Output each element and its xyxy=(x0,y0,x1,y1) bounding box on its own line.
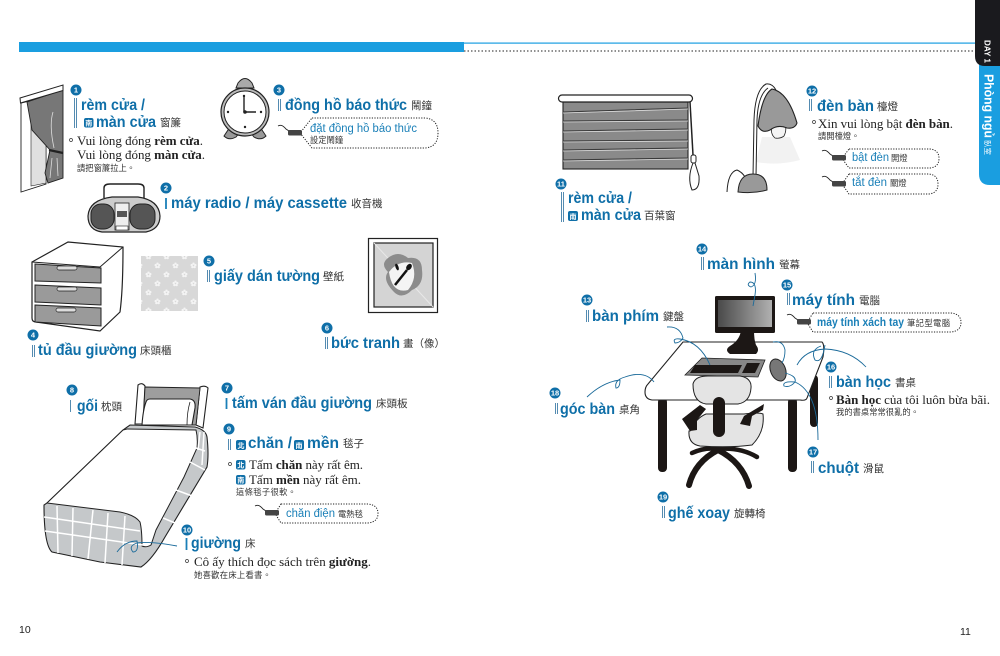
tag: chăn điện: 電熱毯 xyxy=(338,508,363,520)
tag: bật đèn: 開燈 xyxy=(891,152,908,164)
item 7: tấm ván đầu giường: 7 xyxy=(225,384,229,393)
icon: roller blind xyxy=(558,95,699,190)
item 9: chăn / mền: 毯子 xyxy=(343,436,364,451)
item 10: giường: 她喜歡在床上看書。 xyxy=(194,569,271,581)
item 12: đèn bàn: 檯燈 xyxy=(877,99,898,114)
item 1: rèm cửa: 請把窗簾拉上。 xyxy=(77,162,135,174)
tag: máy tính xách tay: máy tính xách tay xyxy=(817,317,905,329)
item 8: gối: gối xyxy=(77,398,98,415)
item 15: máy tính: 電腦 xyxy=(859,293,880,308)
item 5: giấy dán tường: 壁紙 xyxy=(323,269,344,284)
item 1: rèm cửa: Vui lòng đóng màn cửa. xyxy=(77,147,205,162)
item 6: bức tranh: 畫（像） xyxy=(403,336,445,351)
side tab: DAY 1 / Phòng ngủ: 臥室 xyxy=(982,140,993,155)
item 17: chuột: 滑鼠 xyxy=(863,461,884,476)
tag: đặt đồng hồ báo thức: 設定鬧鐘 xyxy=(310,134,344,146)
item 3: đồng hồ báo thức: 鬧鐘 xyxy=(411,98,432,113)
item 7: tấm ván đầu giường: tấm ván đầu giường xyxy=(232,395,372,412)
header bar xyxy=(19,42,975,52)
item 9: chăn / mền: 南 xyxy=(237,476,244,486)
item 19: ghế xoay xyxy=(658,492,766,522)
desk top xyxy=(645,342,824,400)
item 16: bàn học: Bàn học của tôi luôn bừa bãi. xyxy=(836,392,990,407)
item 1: rèm cửa: rèm cửa / xyxy=(81,97,145,114)
item 4: tủ đầu giường xyxy=(28,330,172,359)
item 8: gối: 枕頭 xyxy=(101,399,122,414)
tag: chăn điện xyxy=(255,504,378,523)
page number 11: 11 xyxy=(960,626,971,638)
item 7: tấm ván đầu giường xyxy=(222,382,408,412)
item 13: bàn phím: bàn phím xyxy=(592,308,659,325)
tag: máy tính xách tay xyxy=(787,313,961,332)
item 16: bàn học: 我的書桌常常很亂的。 xyxy=(836,406,919,418)
item 18: góc bàn: góc bàn xyxy=(560,401,615,418)
item 12: đèn bàn: 12 xyxy=(808,87,816,96)
item 12: đèn bàn xyxy=(806,86,953,194)
item 2: máy radio / máy cassette: 2 xyxy=(164,184,168,193)
item 5: giấy dán tường: 5 xyxy=(207,257,211,266)
monitor xyxy=(715,296,775,354)
item 10: giường: Cô ấy thích đọc sách trên giường. xyxy=(194,554,371,569)
keyboard xyxy=(685,358,765,377)
icon: desk lamp xyxy=(727,84,800,193)
item 11: rèm cửa / màn cửa: 百葉窗 xyxy=(644,208,676,223)
item 14: màn hình xyxy=(696,244,800,273)
item 9: chăn / mền: 北 xyxy=(237,460,244,470)
item 12: đèn bàn: đèn bàn xyxy=(817,98,874,115)
item 19: ghế xoay: ghế xoay xyxy=(668,505,730,522)
item 4: tủ đầu giường: 4 xyxy=(31,331,36,340)
item 18: góc bàn: 18 xyxy=(551,389,559,398)
leader lines xyxy=(587,273,866,440)
item 2: máy radio / máy cassette xyxy=(160,182,383,212)
item 4: tủ đầu giường: 床頭櫃 xyxy=(140,343,172,358)
item 13: bàn phím: 鍵盤 xyxy=(663,309,684,324)
side tab: DAY 1 / Phòng ngủ xyxy=(975,0,1000,185)
item 17: chuột xyxy=(808,446,884,477)
tag: đặt đồng hồ báo thức: đặt đồng hồ báo thức xyxy=(310,123,417,135)
tag: tắt đèn xyxy=(822,174,938,194)
item 11: rèm cửa / màn cửa: rèm cửa / xyxy=(568,190,632,207)
item 2: máy radio / máy cassette: máy radio / máy cassette xyxy=(171,195,347,212)
item 1: rèm cửa: 窗簾 xyxy=(160,115,181,130)
page number 10: 10 xyxy=(19,624,31,636)
item 16: bàn học xyxy=(826,362,990,418)
tag: chăn điện: chăn điện xyxy=(286,508,335,520)
item 9: chăn / mền: chăn / xyxy=(248,435,293,452)
item 16: bàn học: 書桌 xyxy=(895,375,916,390)
tag: bật đèn xyxy=(822,149,939,168)
item 17: chuột: 17 xyxy=(809,448,817,457)
item 10: giường: 床 xyxy=(245,536,256,551)
item 12: đèn bàn: 請開檯燈。 xyxy=(818,130,860,142)
icon: bed xyxy=(44,384,208,567)
item 10: giường: giường xyxy=(191,535,241,552)
item 10: giường xyxy=(182,524,371,581)
item 14: màn hình: 螢幕 xyxy=(779,257,800,272)
item 14: màn hình: 14 xyxy=(698,245,707,254)
item 15: máy tính xyxy=(782,280,961,332)
item 9: chăn / mền: 這條毯子很軟。 xyxy=(236,486,296,498)
item 9: chăn / mền xyxy=(224,424,378,523)
item 5: giấy dán tường: giấy dán tường xyxy=(214,268,320,285)
item 14: màn hình: màn hình xyxy=(707,256,775,273)
tag: máy tính xách tay: 筆記型電腦 xyxy=(907,317,950,329)
item 13: bàn phím xyxy=(582,294,684,325)
item 3: đồng hồ báo thức xyxy=(274,84,438,148)
item 1: rèm cửa: Vui lòng đóng rèm cửa. xyxy=(77,133,203,148)
item 18: góc bàn: 桌角 xyxy=(619,402,640,417)
item 11: rèm cửa / màn cửa: 南 xyxy=(570,212,576,222)
item 16: bàn học: bàn học xyxy=(836,374,891,391)
icon: framed picture xyxy=(368,238,438,312)
item 9: chăn / mền: Tấm chăn này rất êm. xyxy=(249,457,363,472)
item 15: máy tính: máy tính xyxy=(792,292,855,309)
item 6: bức tranh xyxy=(322,322,445,352)
item 11: rèm cửa / màn cửa: 11 xyxy=(557,180,565,189)
item 9: chăn / mền: 北 xyxy=(238,441,244,451)
icon: alarm clock xyxy=(221,78,269,139)
item 18: góc bàn xyxy=(550,388,640,418)
item 9: chăn / mền: 南 xyxy=(296,441,302,451)
icon: wallpaper swatch xyxy=(141,256,198,311)
item 19: ghế xoay: 旋轉椅 xyxy=(734,506,766,521)
item 1: rèm cửa: 1 xyxy=(74,86,78,95)
item 12: đèn bàn: Xin vui lòng bật đèn bàn. xyxy=(818,116,953,131)
item 2: máy radio / máy cassette: 收音機 xyxy=(351,196,383,211)
item 3: đồng hồ báo thức: 3 xyxy=(277,86,281,95)
item 1: rèm cửa: 南 xyxy=(85,118,92,128)
tag: bật đèn: bật đèn xyxy=(852,152,889,164)
desk legs xyxy=(658,375,818,472)
item 11: rèm cửa / màn cửa xyxy=(556,178,676,224)
icon: bedside drawers xyxy=(32,242,123,331)
icon: curtain xyxy=(20,85,63,192)
item 15: máy tính: 15 xyxy=(783,281,791,290)
icon: radio xyxy=(88,184,160,232)
side tab: DAY 1 / Phòng ngủ: DAY 1 xyxy=(982,40,992,63)
item 6: bức tranh: bức tranh xyxy=(331,335,400,352)
chair xyxy=(682,376,764,486)
item 9: chăn / mền: Tấm mền này rất êm. xyxy=(249,472,361,487)
item 1: rèm cửa: màn cửa xyxy=(96,114,156,131)
item 1: rèm cửa xyxy=(70,84,205,174)
item 8: gối xyxy=(66,384,122,415)
tag: đặt đồng hồ báo thức xyxy=(278,118,438,148)
item 9: chăn / mền: 9 xyxy=(227,425,231,434)
item 11: rèm cửa / màn cửa: màn cửa xyxy=(581,207,641,224)
tag: tắt đèn: tắt đèn xyxy=(852,176,887,189)
item 13: bàn phím: 13 xyxy=(583,296,591,305)
item 17: chuột: chuột xyxy=(818,460,860,477)
item 8: gối: 8 xyxy=(70,386,74,395)
item 5: giấy dán tường xyxy=(204,256,344,285)
item 6: bức tranh: 6 xyxy=(325,324,329,333)
item 9: chăn / mền: mền xyxy=(307,435,339,452)
mouse xyxy=(767,357,789,383)
side tab: DAY 1 / Phòng ngủ: Phòng ngủ xyxy=(982,74,996,138)
item 4: tủ đầu giường: tủ đầu giường xyxy=(38,342,137,359)
icon: desk with monitor, keyboard, mouse and swivel chair xyxy=(645,296,824,486)
item 19: ghế xoay: 19 xyxy=(659,493,667,502)
item 3: đồng hồ báo thức: đồng hồ báo thức xyxy=(285,97,407,114)
tag: tắt đèn: 關燈 xyxy=(890,177,907,189)
item 10: giường: 10 xyxy=(183,526,191,535)
item 7: tấm ván đầu giường: 床頭板 xyxy=(376,396,408,411)
item 16: bàn học: 16 xyxy=(827,363,835,372)
